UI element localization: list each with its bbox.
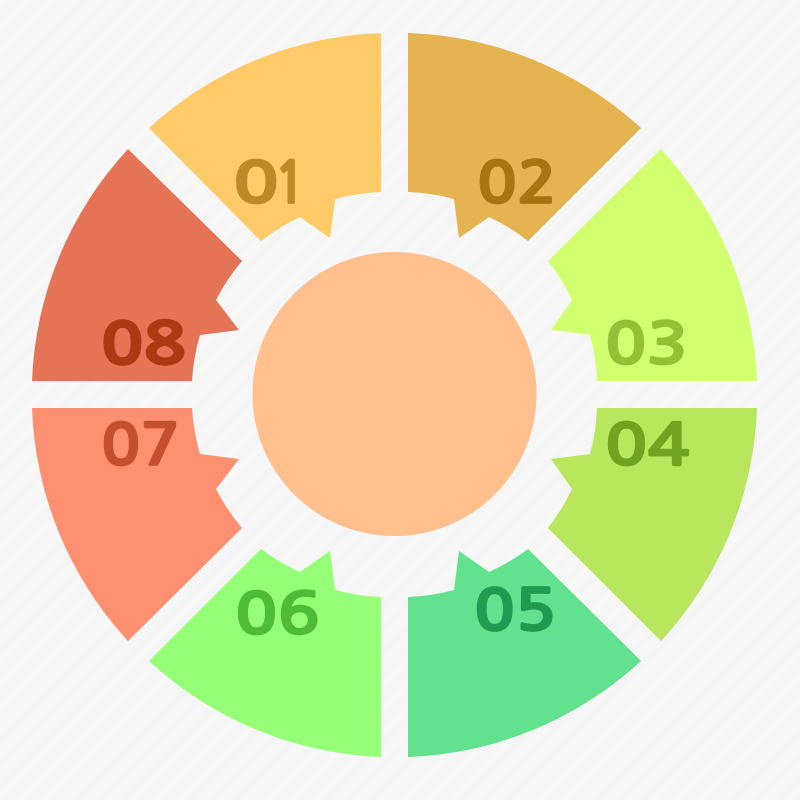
number 08: 08	[101, 317, 186, 373]
number 01	[233, 156, 306, 212]
number 04: 04	[605, 418, 690, 474]
center circle	[252, 252, 536, 536]
number 01: 1	[274, 156, 306, 212]
segment 04	[548, 408, 757, 641]
number 07: 07	[101, 418, 180, 474]
number 05: 05	[474, 584, 556, 640]
segment 02	[408, 33, 641, 241]
segment 07	[32, 408, 242, 641]
number 02: 02	[477, 156, 557, 212]
segment 05	[408, 549, 641, 757]
segment 03	[548, 149, 757, 381]
segment 08	[32, 149, 242, 381]
number 01: 0	[233, 156, 279, 212]
segment 01	[149, 33, 381, 241]
number 03: 03	[605, 317, 688, 373]
segment 06	[149, 549, 381, 757]
number 06: 06	[235, 587, 320, 643]
